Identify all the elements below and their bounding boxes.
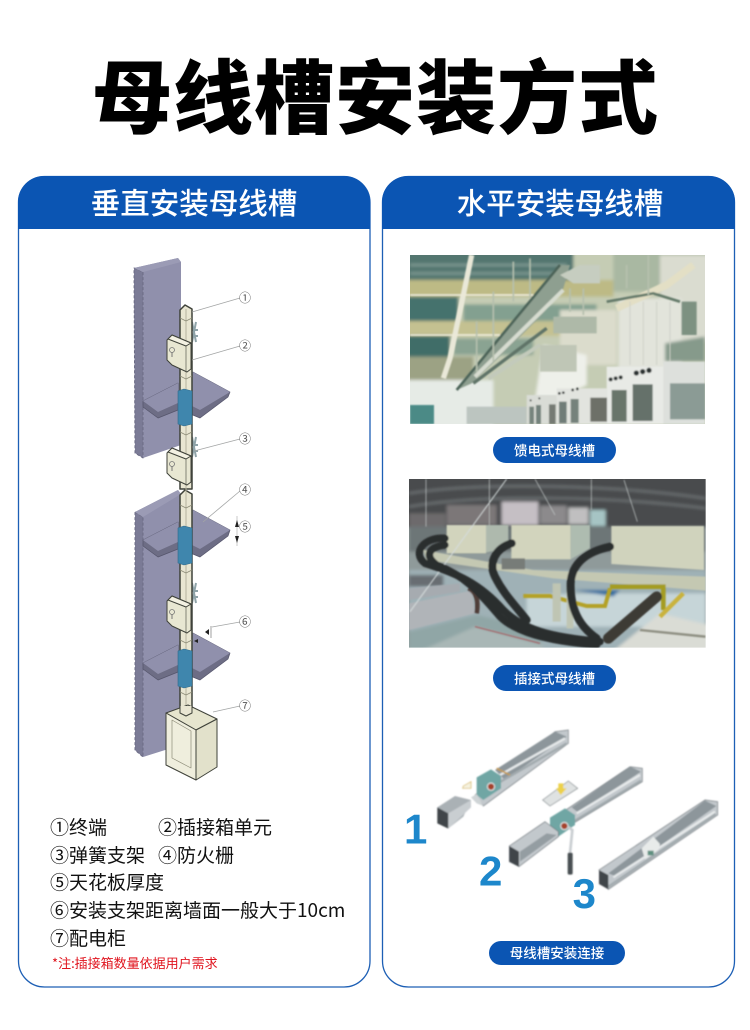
legend list: ③弹簧支架	[50, 841, 145, 868]
callout numbers: ②	[239, 337, 251, 354]
step numbers: 1	[404, 805, 427, 852]
step numbers: 3	[573, 870, 596, 917]
callout leader lines	[192, 298, 240, 712]
heading: vertical installation	[18, 176, 370, 229]
heading: horizontal installation: 水平安装母线槽	[457, 181, 663, 223]
callout numbers: ④	[239, 481, 251, 498]
heading: vertical installation: 垂直安装母线槽	[91, 181, 297, 223]
step 2 busway	[509, 767, 642, 875]
legend list: ⑦配电柜	[50, 924, 126, 951]
distribution cabinet	[166, 705, 217, 780]
slab 2	[143, 510, 230, 557]
label: plug-in busway	[493, 665, 616, 691]
step 3 busway	[599, 800, 718, 889]
footnote: *注:插接箱数量依据用户需求	[52, 953, 218, 972]
callout numbers: ⑥	[239, 613, 251, 630]
lower wall	[135, 490, 181, 757]
step 1 busway	[437, 730, 568, 829]
callout numbers: ⑤	[239, 518, 251, 535]
diagram: vertical busway riser	[134, 258, 251, 780]
busway	[180, 305, 192, 714]
panel: horizontal installation	[382, 176, 735, 987]
dimension markers	[194, 516, 239, 643]
plug-in boxes	[167, 335, 191, 633]
fire barriers	[178, 389, 192, 688]
legend list: ②插接箱单元	[158, 813, 272, 840]
springs	[190, 322, 198, 603]
label: feeder busway: 馈电式母线槽	[514, 440, 595, 460]
legend list: ⑤天花板厚度	[50, 868, 164, 895]
label: connection	[489, 941, 625, 965]
heading: horizontal installation	[382, 176, 735, 229]
title: 母线槽安装方式	[92, 35, 658, 151]
panel: vertical installation	[18, 176, 370, 987]
diagram: busway connection steps	[404, 730, 718, 917]
callout numbers: ①	[239, 289, 251, 306]
callout numbers	[239, 289, 251, 714]
upper wall	[134, 258, 181, 458]
slab 3	[143, 633, 230, 680]
slab 1	[143, 372, 230, 418]
callout numbers: ③	[239, 430, 251, 447]
label: plug-in busway: 插接式母线槽	[514, 668, 595, 688]
callout numbers: ⑦	[239, 697, 251, 714]
legend list: ⑥安装支架距离墙面一般大于10cm	[50, 896, 345, 923]
label: connection: 母线槽安装连接	[510, 942, 605, 962]
step numbers: 2	[479, 848, 502, 895]
legend list: ①终端	[50, 813, 107, 840]
legend list	[50, 813, 345, 951]
photo: feeder busway	[407, 252, 708, 427]
label: feeder busway	[493, 437, 616, 463]
photo: plug-in busway	[406, 476, 709, 651]
step numbers	[404, 805, 596, 917]
legend list: ④防火栅	[158, 841, 234, 868]
